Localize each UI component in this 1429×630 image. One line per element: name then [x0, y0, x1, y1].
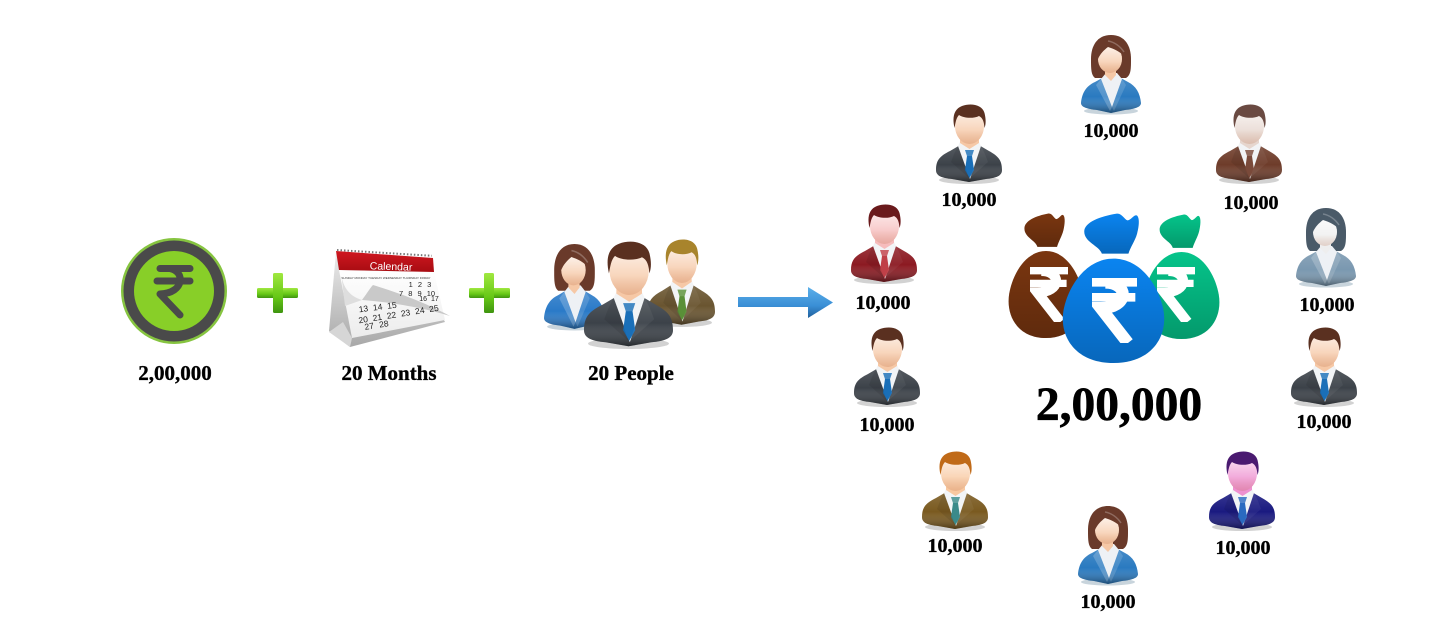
person: bottom-right purple man: [1209, 451, 1275, 559]
person: bottom woman: 10,000: [1080, 591, 1136, 613]
person: upper-left man: [936, 104, 1002, 211]
icon: calendar: 16 17: [419, 296, 439, 303]
icon: calendar: 20 21 22 23 24 25: [358, 303, 440, 325]
icon: calendar: 27 28: [364, 318, 390, 332]
icon: rupee coin: [121, 238, 227, 344]
person: left red man: 10,000: [856, 292, 910, 314]
person: lower-right man: [1291, 327, 1357, 433]
icon: plus sign: [257, 273, 298, 313]
person: lower-left man: [854, 327, 920, 436]
person: right grey woman: [1296, 208, 1356, 316]
panel: payout circle: [851, 35, 1357, 613]
icon: plus sign: [469, 273, 510, 313]
total amount: 2,00,000: [1036, 379, 1202, 431]
person: upper-left man: 10,000: [942, 189, 996, 211]
icon: calendar: 1 2 3: [409, 280, 431, 289]
person: bottom woman: [1078, 506, 1138, 613]
panel: left equation: [121, 238, 715, 385]
icon: calendar: 13 14 15: [358, 300, 397, 314]
person: lower-left man: 10,000: [860, 414, 914, 436]
icon: group of people: [544, 240, 715, 349]
person: bottom-left olive man: 10,000: [928, 535, 982, 557]
icon: calendar: 7 8 9 10: [399, 289, 435, 298]
person: left red man: [851, 204, 917, 314]
person: upper-right man: 10,000: [1224, 192, 1278, 214]
person: right grey woman: 10,000: [1300, 294, 1354, 316]
calendar label: 20 Months: [341, 361, 437, 385]
icon: money bags: [1009, 214, 1219, 363]
person: top woman: 10,000: [1084, 120, 1138, 142]
icon: calendar: SUNDAY MONDAY TUESDAY WEDNESDAY THURSDAY FRIDAY: [341, 276, 431, 280]
coin amount label: 2,00,000: [138, 361, 212, 385]
icon: calendar: Calendar: [370, 260, 413, 274]
person: upper-right man: [1216, 104, 1282, 214]
person: bottom-left olive man: [922, 451, 988, 557]
person: lower-right man: 10,000: [1296, 411, 1352, 433]
people label: 20 People: [588, 361, 674, 385]
icon: calendar: [329, 250, 450, 347]
person: top woman: [1081, 35, 1141, 142]
arrow: [738, 287, 833, 318]
person: bottom-right purple man: 10,000: [1216, 537, 1270, 559]
